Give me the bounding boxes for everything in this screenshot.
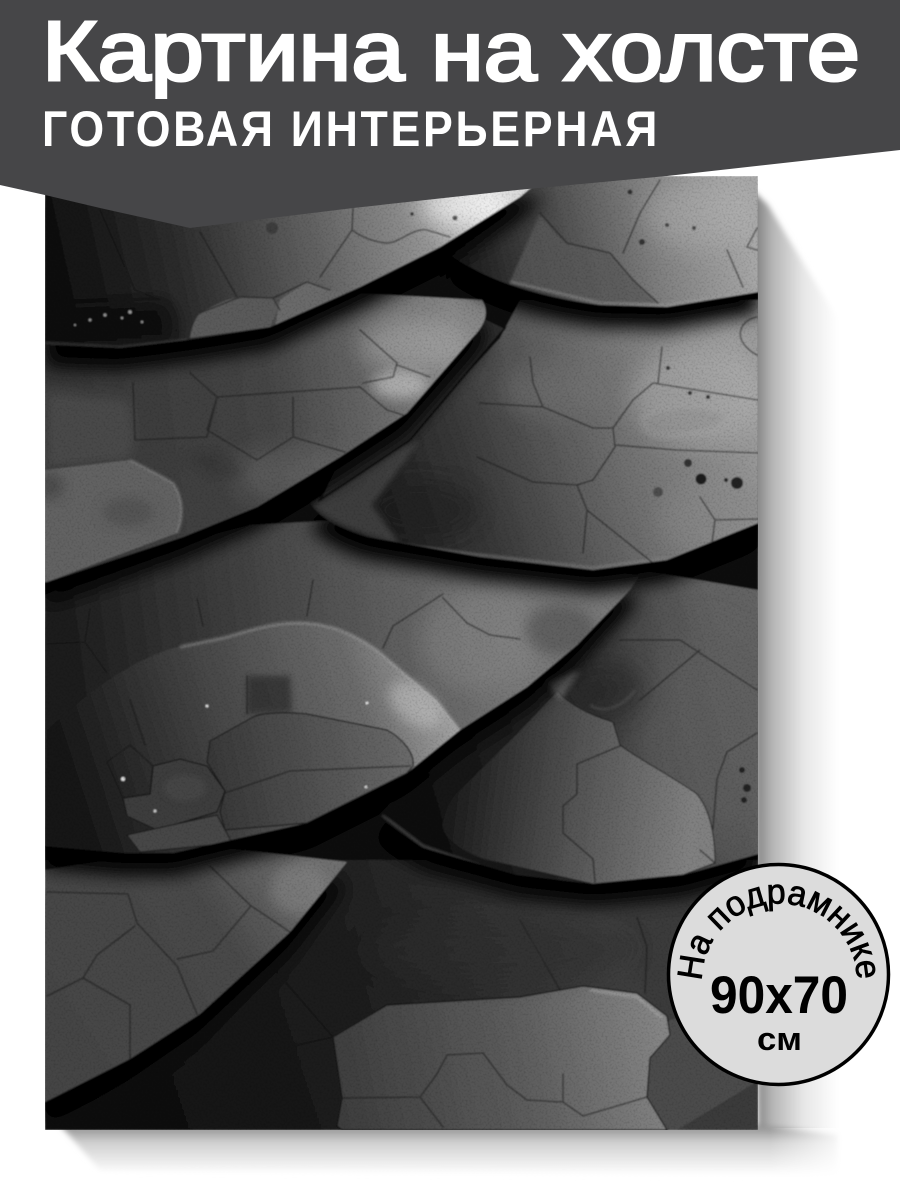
speckled edge: [382, 815, 480, 866]
lobe: bottom right cell: [648, 1019, 754, 1130]
canvas shadow on the wall: [60, 188, 850, 1188]
badge unit: см: [757, 1021, 802, 1057]
lobe: small cell cluster: [123, 759, 225, 830]
subtitle: ГОТОВАЯ ИНТЕРЬЕРНАЯ: [42, 101, 660, 157]
header banner: [0, 0, 900, 228]
scale: second row right, large: [310, 300, 780, 570]
title: Картина на холсте: [42, 4, 860, 98]
badge curved label: На подрамнике: [677, 884, 876, 979]
badge: size on stretcher: [666, 862, 890, 1086]
ridge between the second-row scales: [320, 318, 505, 500]
lobe: lower left: [45, 460, 182, 582]
lobe: third row right: [443, 691, 715, 884]
dark notch: [247, 676, 292, 714]
badge size value: 90х70: [710, 966, 848, 1025]
lobe: upper raised plate: [45, 623, 460, 853]
scale: third row right: [377, 570, 770, 884]
speckled rim: [312, 440, 420, 545]
scale: top left: [45, 176, 545, 348]
scale: second row left: [32, 290, 486, 582]
light ring: [702, 414, 718, 422]
lobes: lower rim cells: [190, 297, 280, 338]
scale: bottom centre: [45, 860, 758, 1130]
scale: bottom left: [45, 845, 347, 1102]
lobe: inner plate: [207, 713, 413, 830]
canvas artwork: black and grey scales: [32, 176, 780, 1130]
lobe: bottom centre raised: [333, 986, 670, 1130]
dark speckled spot: [45, 300, 176, 345]
scale: top right: [447, 176, 758, 307]
lobe: top right inner: [510, 213, 658, 305]
scale: third row left: [45, 520, 640, 853]
canvas texture grain: [45, 176, 758, 1130]
